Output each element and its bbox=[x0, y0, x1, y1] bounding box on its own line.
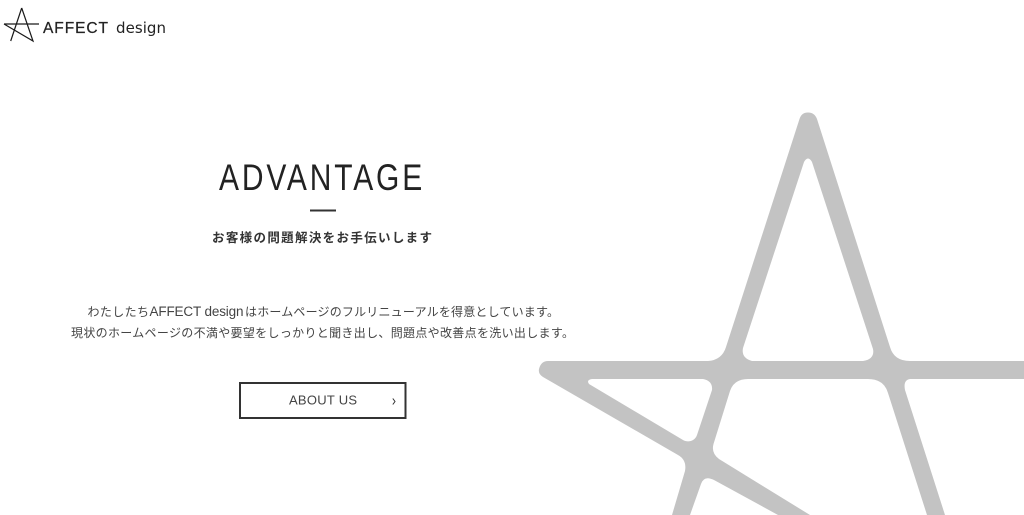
body text bbox=[71, 304, 574, 340]
subheading: お客様の問題解決をお手伝いします bbox=[212, 230, 432, 245]
body line 1: わたしたち bbox=[88, 305, 149, 319]
button frame bbox=[240, 383, 406, 418]
body line 2: 現状のホームページの不満や要望をしっかりと聞き出し、問題点や改善点を洗い出します。 bbox=[71, 325, 574, 340]
button label: ABOUT US bbox=[289, 392, 357, 408]
icon: chevron arrow bbox=[393, 398, 395, 404]
button: ABOUT US bbox=[240, 383, 406, 418]
body line 1: はホームページのフルリニューアルを得意としています。 bbox=[245, 304, 559, 319]
logo wordmark: AFFECT bbox=[43, 20, 109, 37]
icon: logo star bbox=[4, 8, 39, 41]
heading: ADVANTAGE: ADVANTAGE bbox=[219, 157, 422, 199]
body line 1 bbox=[88, 304, 559, 319]
heading divider bbox=[310, 210, 336, 212]
body line 1: AFFECT design bbox=[150, 304, 244, 319]
decorative large star logo bbox=[539, 112, 1024, 515]
logo word: design: design bbox=[116, 19, 166, 37]
logo: AFFECT design bbox=[4, 8, 166, 41]
